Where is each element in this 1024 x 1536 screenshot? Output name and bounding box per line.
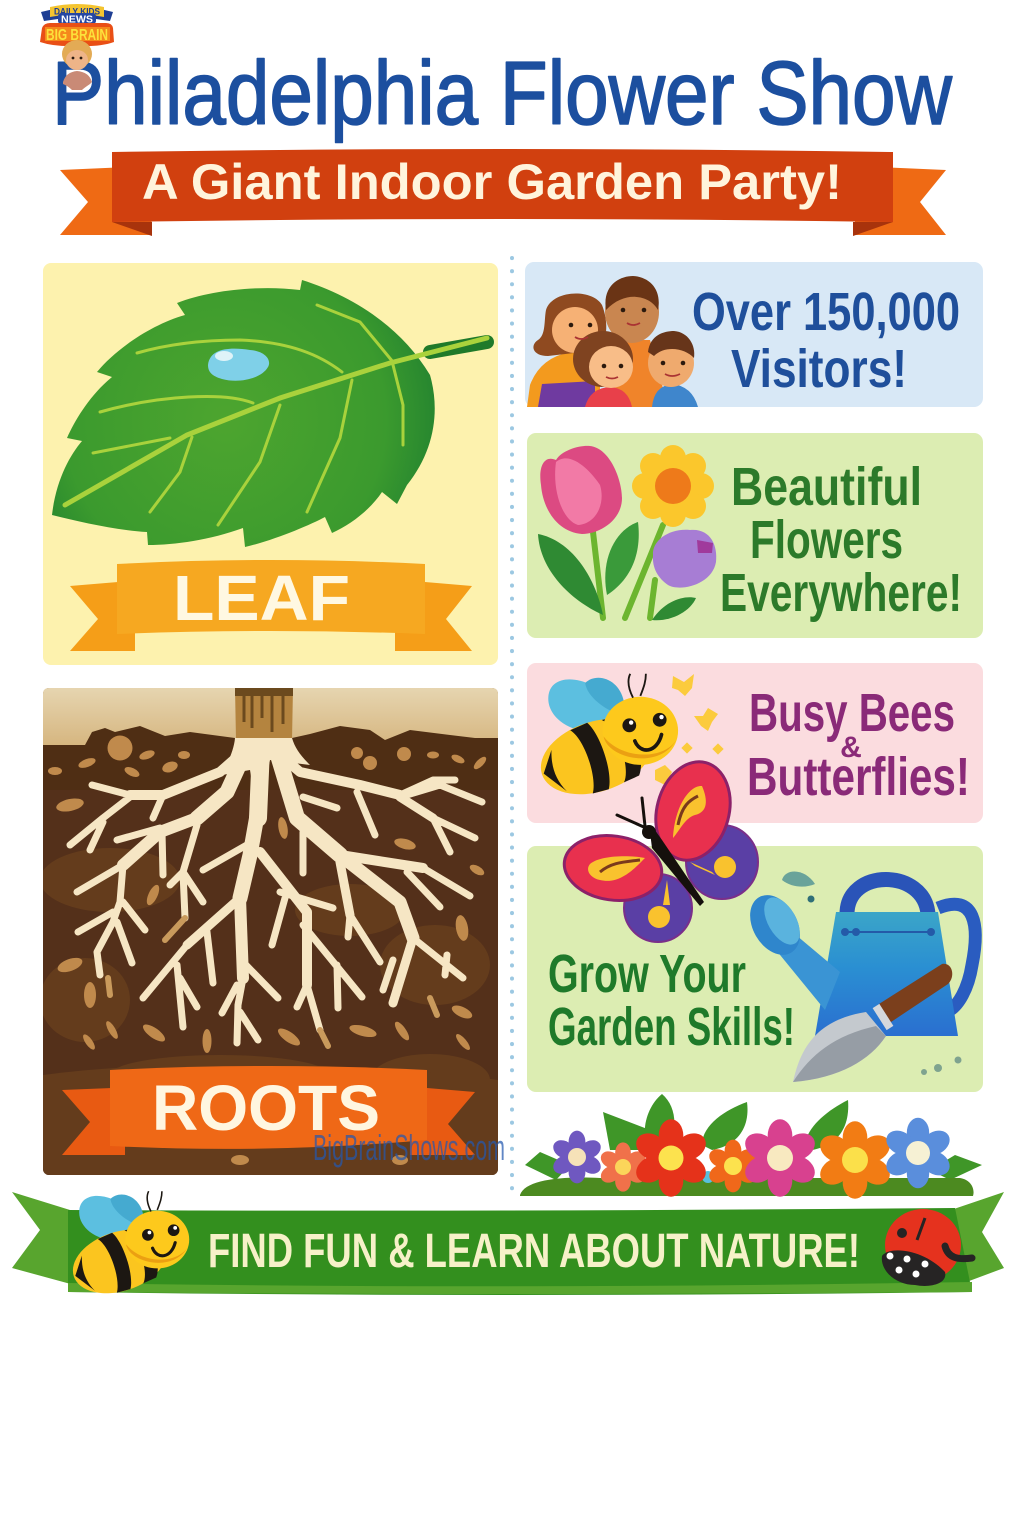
- banner: roots ribbon: ROOTS: [152, 1072, 380, 1144]
- watermark: BigBrainShows.com: [313, 1127, 505, 1168]
- icon: flower bouquet: [538, 445, 716, 620]
- panel: visitors: [525, 262, 983, 407]
- panel: flowers: [527, 433, 983, 638]
- icon: family: [527, 276, 698, 407]
- icon: mascot: [62, 40, 92, 90]
- panel: roots: [40, 688, 498, 1175]
- icon: bee: [531, 674, 678, 807]
- icon: bee: [65, 1191, 189, 1305]
- soil specks: [48, 736, 488, 1165]
- logo: BIG BRAIN: [46, 27, 108, 44]
- text: visitors: Visitors!: [731, 339, 907, 399]
- banner: subtitle ribbon: [60, 149, 946, 236]
- soil patches: [40, 848, 498, 1175]
- text: flowers: [720, 457, 962, 623]
- banner: leaf ribbon: LEAF: [173, 562, 350, 634]
- text: visitors: Over 150,000: [692, 282, 960, 342]
- text: garden skills: Garden Skills!: [548, 997, 795, 1057]
- icon: ladybug: [882, 1209, 972, 1286]
- icon: flower bed: [520, 1094, 982, 1199]
- icon: leaf: [52, 280, 487, 547]
- banner: subtitle ribbon: A Giant Indoor Garden Party!: [142, 154, 842, 210]
- icon: stem stump: [235, 688, 293, 740]
- text: flowers: Beautiful: [731, 457, 922, 517]
- banner: leaf ribbon: [70, 560, 472, 651]
- roots illustration: [70, 738, 482, 1043]
- panel: bees and butterflies: [527, 663, 983, 823]
- logo: NEWS: [61, 14, 93, 26]
- icon: watering can: [740, 871, 975, 1082]
- panel: garden skills: [527, 753, 983, 1092]
- text: bees and butterflies: Butterflies!: [747, 747, 970, 807]
- text: garden skills: Grow Your: [548, 944, 746, 1004]
- banner: bottom ribbon: [12, 1191, 1004, 1305]
- logo: DAILY KIDS: [54, 6, 100, 18]
- banner: roots ribbon: [62, 1066, 475, 1155]
- text: bees and butterflies: Busy Bees: [749, 683, 955, 743]
- text: flowers: Flowers: [750, 510, 903, 570]
- text: bees and butterflies: &: [840, 731, 862, 764]
- icon: sparkles: [655, 674, 724, 785]
- icon: butterfly: [560, 753, 758, 942]
- text: garden skills: [548, 944, 795, 1057]
- text: bees and butterflies: [747, 683, 970, 807]
- logo: [40, 4, 114, 90]
- panel: leaf: [43, 263, 498, 665]
- text: visitors: [692, 282, 960, 399]
